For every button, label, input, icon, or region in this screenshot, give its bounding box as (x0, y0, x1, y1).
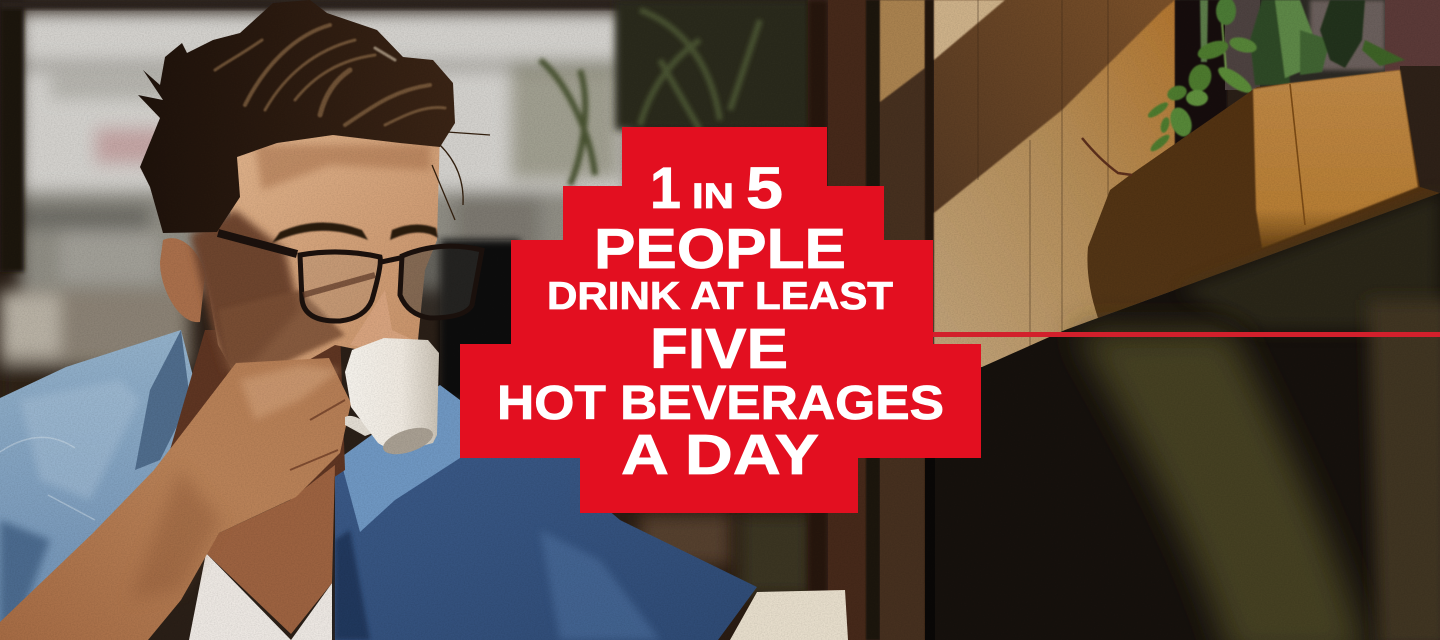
dark denim body and sleeve (335, 440, 757, 640)
blurred dark foreground (925, 193, 1440, 640)
stray hair strands (432, 132, 490, 220)
headline text: 1 (650, 156, 681, 221)
arm and hand (0, 358, 351, 640)
headline text: A DAY (621, 423, 819, 487)
headline text: 5 (746, 156, 783, 221)
plants and backdrop in the top right corner (1146, 0, 1440, 196)
light denim shoulder (0, 330, 220, 640)
headline text: FIVE (650, 317, 788, 381)
white t-shirt (189, 553, 332, 640)
headline text: IN (692, 177, 734, 216)
chest (206, 465, 335, 634)
face (205, 130, 440, 375)
red stepped panel (460, 127, 981, 513)
headline text (497, 156, 944, 487)
headline text: PEOPLE (594, 217, 846, 281)
coffee cup (345, 338, 439, 459)
glasses (218, 233, 482, 321)
phone (730, 590, 848, 640)
planter box (1082, 70, 1440, 318)
headline text: DRINK AT LEAST (547, 275, 893, 318)
neck (170, 330, 345, 500)
red horizontal rule (933, 332, 1440, 337)
nose (350, 290, 418, 350)
hair highlights (215, 25, 445, 125)
wooden wall (808, 0, 1180, 640)
shirt collar (340, 385, 460, 532)
hair (138, 0, 455, 233)
headline text: HOT BEVERAGES (497, 377, 944, 430)
eyebrows (272, 222, 438, 243)
ear (160, 238, 205, 322)
man drinking coffee (0, 0, 848, 640)
